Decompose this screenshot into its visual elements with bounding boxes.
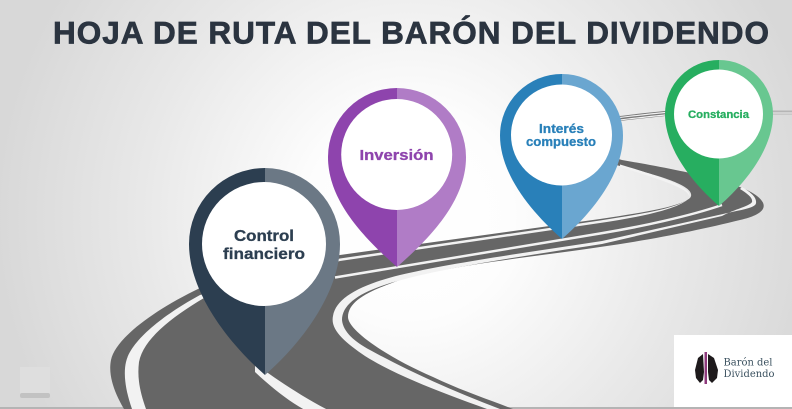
road: centre stripe (335, 205, 722, 278)
logo icon (695, 352, 718, 384)
label: control financiero: Control (234, 228, 294, 245)
pin: constancia (665, 60, 773, 206)
logo text: Barón del (724, 356, 773, 368)
pin: interes compuesto (500, 74, 623, 239)
road: far upper stretch (560, 112, 792, 130)
road (110, 112, 792, 409)
pin: control financiero (189, 168, 340, 375)
title: HOJA DE RUTA DEL BARÓN DEL DIVIDENDO (53, 14, 769, 50)
label: interes compuesto: Interés (539, 121, 584, 136)
small placeholder box bottom left (20, 367, 50, 398)
label: control financiero: financiero (223, 246, 305, 263)
logo text: Dividendo (724, 368, 774, 380)
pin: inversion (328, 88, 466, 267)
road: left edge stripe (125, 164, 690, 409)
logo box (674, 335, 792, 407)
label: interes compuesto: compuesto (526, 134, 596, 149)
label: inversion: Inversión (360, 147, 434, 164)
label: constancia: Constancia (688, 109, 750, 121)
bottom edge line (0, 407, 792, 409)
road: main S-curve surface (110, 142, 764, 409)
road: right edge stripe (333, 187, 756, 409)
